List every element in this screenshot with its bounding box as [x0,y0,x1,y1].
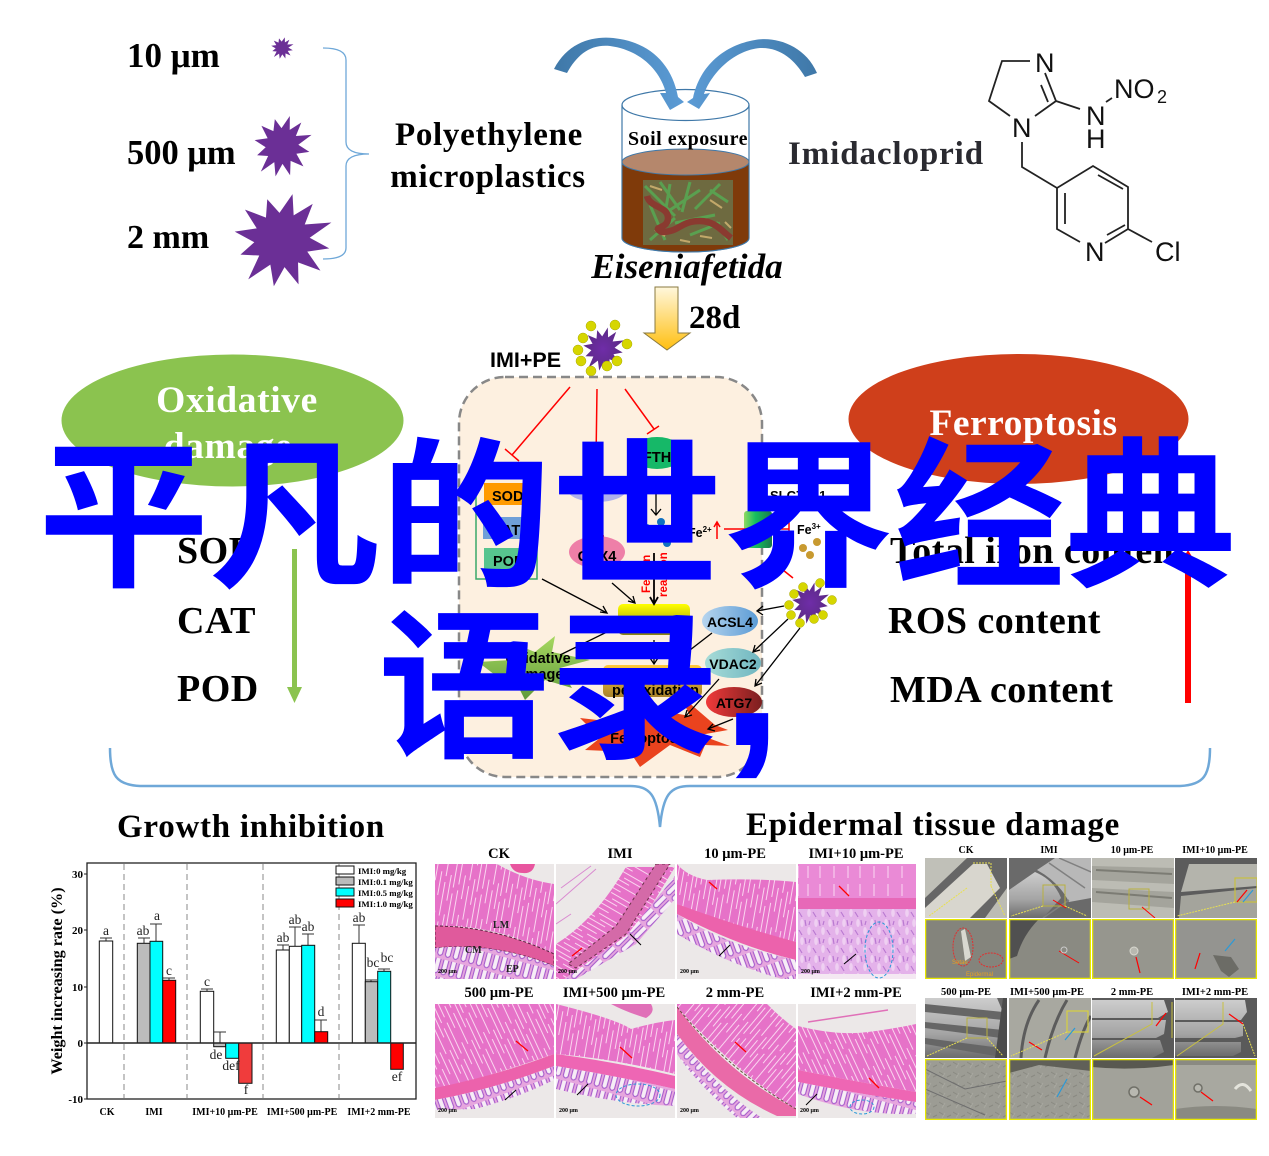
ellipse: ferroptosis: Ferroptosis [929,403,1118,444]
histology panel: 2 mm-PE: 200 μm [680,1108,699,1114]
histology panel: CK: CM [465,945,482,956]
category labels: IMI+500 μm-PE [267,1107,338,1118]
histology panel: 10 µm-PE: 200 μm [680,969,699,975]
category labels: IMI+10 μm-PE [192,1107,258,1118]
label: soil exposure: Soil exposure [628,128,748,150]
heading: imidacloprid: Imidacloprid [788,136,984,172]
oxidative damage burst: Oxidative [505,651,571,667]
histology panel: CK: 200 μm [438,969,457,975]
SEM top panel: CK [925,858,1007,918]
icon: 500 µm particle [248,110,316,182]
list: ferroptosis markers: Total iron content [890,530,1187,572]
legend [336,866,413,909]
panel: cell pathway [459,377,762,777]
legend: IMI:0.5 mg/kg [358,888,413,898]
ferroptosis burst [580,695,730,767]
overlay title: blue Chinese text: 语录, [378,552,783,791]
significance letters: ef [392,1069,403,1084]
SEM detail: 500 µm-PE [925,1059,1007,1120]
significance letters: ab [302,919,315,934]
ATG7 [706,687,762,717]
molecule: imidacloprid: N [1086,101,1106,131]
icon: right IMI PE particle [784,578,836,628]
tick labels: 10 [72,982,84,994]
SEM titles: 500 μm-PE [941,987,991,998]
histology panel: IMI+500 µm-PE [556,1004,675,1118]
molecule: imidacloprid: NO [1114,74,1154,104]
Lipid peroxidation block [603,665,702,699]
iron dots [644,518,671,547]
bars [99,941,403,1083]
iron regulation marks [714,521,793,578]
SLC7A11 channel: SLC7A11 [770,488,826,503]
Fe3+ label: Fe [797,523,812,537]
significance letters: a [103,923,109,938]
histology panel: IMI [556,864,675,979]
list: ferroptosis markers: ROS content [888,600,1101,642]
arrow: 28 day exposure [644,287,690,350]
significance letters: bc [381,950,393,965]
ACSL4 [702,606,758,636]
SEM top panel: IMI+500 µm-PE [1009,998,1091,1058]
heading: growth inhibition: Growth inhibition [117,809,385,845]
VDAC2 [705,648,761,678]
Lipid peroxidation block: peroxidation [612,683,699,699]
histology titles: 2 mm-PE [706,985,764,1001]
significance letters: d [318,1004,325,1019]
ATG7: ATG7 [716,695,752,711]
histology panel: 500 µm-PE: 200 μm [438,1108,457,1114]
size label: 2 mm: 2 mm [127,219,209,256]
tick labels: -10 [68,1094,83,1106]
heading: epidermal tissue damage: Epidermal tissue damage [746,807,1120,843]
y axis title: Weight increasing rate (%) [48,887,66,1075]
FTH1: FTH1 [643,450,679,466]
SLC7A11 channel [744,488,826,548]
significance letters: bc [367,955,379,970]
icon: 2 mm particle [227,185,337,295]
molecule: imidacloprid: N [1085,237,1104,267]
SEM top panel: IMI [1009,858,1091,918]
SEM detail: CK: Setae [952,960,968,966]
ACSL4: ACSL4 [707,614,753,630]
legend: IMI:1.0 mg/kg [358,899,413,909]
tick labels: 0 [78,1038,84,1050]
histology panel: CK [435,864,554,979]
iron dots [799,538,821,559]
histology panel: 500 µm-PE [435,1004,554,1118]
significance letters: c [166,963,172,978]
SEM titles [941,845,1248,998]
ellipse: oxidative damage: damage [164,426,292,467]
ellipse: oxidative damage [62,354,404,486]
histology panel: CK: EP [506,964,519,975]
category labels: IMI+2 mm-PE [347,1107,411,1118]
enzyme box [476,478,537,579]
list: antioxidant enzymes: SOD [177,530,257,572]
SEM top panel: 500 µm-PE [925,998,1007,1058]
significance letters: f [244,1082,249,1097]
icon: 10 µm particle [269,35,295,61]
list: antioxidant enzymes: CAT [177,600,256,642]
arrow: increased markers [1179,550,1197,703]
significance letters: c [204,974,210,989]
significance letters: ab [277,930,290,945]
FTH1 [630,437,684,469]
legend: IMI:0.1 mg/kg [358,877,413,887]
histology titles: CK [488,846,511,862]
SEM top panel: 10 µm-PE [1092,858,1174,918]
size label: 10 µm: 10 μm [127,36,220,75]
label: IMI+PE: IMI+PE [490,348,561,372]
histology panel: 2 mm-PE [677,1004,796,1118]
oxidative damage burst: damage [509,667,563,683]
SEM titles: 10 μm-PE [1111,845,1154,856]
histology titles: IMI [608,846,633,862]
label: species name: Eiseniafetida [590,247,783,286]
histology titles: 500 μm-PE [464,985,534,1001]
significance letters: de [210,1047,222,1062]
Fe2+ label: 2+ [703,525,712,534]
label: 28d: 28d [689,300,740,336]
bar chart: weight increasing rate [48,863,416,1118]
SEM top panel: IMI+2 mm-PE [1175,998,1257,1058]
SEM detail: IMI+10 µm-PE [1175,919,1257,979]
histology panel: CK: LM [493,920,510,931]
histology panel: IMI+500 µm-PE: 200 μm [559,1108,578,1114]
tick labels: 30 [72,869,84,881]
category labels: CK [100,1107,115,1118]
size label: 500 µm: 500 μm [127,134,236,172]
molecule: imidacloprid: Cl [1155,237,1180,267]
axis ticks [84,874,87,1099]
list: antioxidant enzymes: POD [177,668,259,710]
SEM titles: IMI+2 mm-PE [1182,987,1248,998]
Lipid ROS block [618,604,690,635]
enzyme box: SOD [492,489,523,505]
SEM titles: CK [958,845,974,856]
significance letters: a [154,908,160,923]
histology panel: IMI+2 mm-PE: 200 μm [800,1108,819,1114]
significance letters: ab [353,910,366,925]
molecule: imidacloprid: N [1035,48,1054,78]
arrows from particle to targets [753,606,800,686]
significance letters: ab [289,912,302,927]
SEM titles: 2 mm-PE [1111,987,1153,998]
Fe2+ label: Fe [688,526,703,540]
list: ferroptosis markers: MDA content [890,669,1113,711]
SEM titles: IMI+10 μm-PE [1182,845,1248,856]
overlay title: blue Chinese text [38,428,1236,791]
histology titles: IMI+500 μm-PE [563,985,665,1001]
SEM top panel: IMI+10 µm-PE [1175,858,1257,918]
SEM titles: IMI+500 μm-PE [1010,987,1084,998]
SEM titles: IMI [1040,845,1058,856]
enzyme box: POD [493,554,524,570]
GPX4: GPX4 [578,549,616,565]
large bracket [110,748,1210,827]
arrow: decreased enzymes [287,549,302,703]
histology titles: IMI+2 mm-PE [810,985,902,1001]
legend: IMI:0 mg/kg [358,866,407,876]
Fenton label: Fenton [641,555,653,593]
SEM detail: IMI+2 mm-PE [1175,1059,1257,1120]
Fe3+ label: 3+ [812,522,821,531]
lavender enzyme [568,478,626,502]
histology panel: IMI+10 µm-PE [798,864,916,979]
arrow: right input to soil [687,39,817,109]
category labels: IMI [145,1107,163,1118]
black arrows [542,493,733,731]
heading: polyethylene microplastics: microplastics [390,159,586,195]
significance letters: def [222,1058,240,1073]
SEM top panel: 2 mm-PE [1092,998,1174,1058]
SEM detail: CK [925,919,1007,979]
histology panel: IMI: 200 μm [558,969,577,975]
SEM detail: IMI [1009,919,1091,979]
photo: earthworm [643,180,733,245]
SEM detail: IMI+500 µm-PE [1009,1059,1091,1120]
significance letters: ab [137,923,150,938]
VDAC2: VDAC2 [709,656,757,672]
heading: polyethylene microplastics: Polyethylene [395,117,583,153]
molecule: imidacloprid: 2 [1157,87,1167,107]
histology titles: 10 μm-PE [704,846,766,862]
molecule: imidacloprid [989,48,1180,267]
overlay title: blue Chinese text: 平凡的世界经典 [38,428,1236,609]
tick labels: 20 [72,925,84,937]
reaction label: reaction [658,552,670,597]
histology panel: IMI+2 mm-PE [798,1004,916,1118]
molecule: imidacloprid: N [1012,113,1032,143]
SEM detail: 2 mm-PE [1092,1059,1174,1120]
oxidative damage burst [478,636,590,700]
SEM detail: CK: Epidermal [966,972,993,978]
histology panel: 10 µm-PE [677,864,796,979]
error bars [100,924,403,1083]
histology panel: IMI+10 µm-PE: 200 μm [801,969,820,975]
plot frame [87,863,416,1099]
molecule: imidacloprid: H [1086,124,1106,154]
size bracket [323,48,369,259]
zero line [87,1042,416,1044]
enzyme box: AT [502,523,520,539]
inhibition lines [505,387,659,536]
SEM detail: 10 µm-PE [1092,919,1174,979]
icon: IMI adsorbed PE particle [573,320,632,376]
ferroptosis burst: Ferroptosis [610,731,690,747]
arrow: left input to soil [554,38,684,110]
ellipse: oxidative damage: Oxidative [156,380,318,421]
ellipse: ferroptosis [848,354,1188,484]
GPX4 [569,536,625,568]
histology titles: IMI+10 μm-PE [808,846,904,862]
soil exposure beaker [622,90,749,252]
